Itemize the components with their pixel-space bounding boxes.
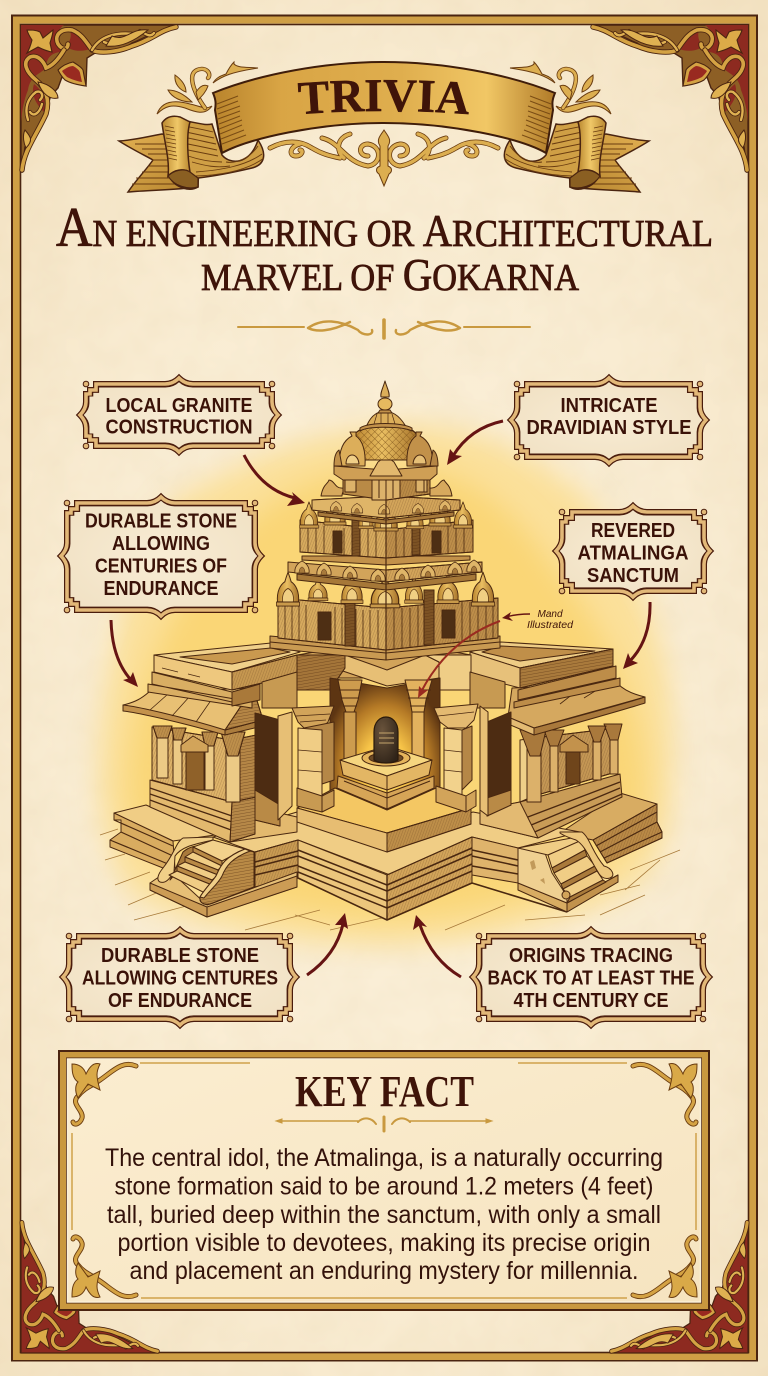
inner pillars xyxy=(338,680,432,762)
tower xyxy=(270,381,500,660)
wing base xyxy=(480,774,622,838)
dome crown xyxy=(360,411,412,431)
arrow: sanctum pointer xyxy=(418,621,500,698)
callout: revered atmalinga: ATMALINGA xyxy=(578,542,689,564)
stairs left balustrade xyxy=(158,837,213,882)
wing wall xyxy=(152,727,232,802)
stairs right balustrade xyxy=(560,832,613,879)
callout: durable stone lower xyxy=(63,930,296,1025)
right wing xyxy=(470,642,645,838)
upper cornice arches xyxy=(330,500,451,514)
stairs top xyxy=(518,837,584,855)
callout: revered atmalinga xyxy=(556,506,710,597)
callout: intricate dravidian xyxy=(511,378,706,463)
upper row of kuta domes xyxy=(300,500,472,531)
callout: local granite: CONSTRUCTION xyxy=(106,416,252,438)
wing parapet xyxy=(470,642,613,668)
callout: durable stone lower: DURABLE STONE xyxy=(101,944,259,967)
title line 1: AN ENGINEERING OR ARCHITECTURAL xyxy=(56,197,713,259)
arrow: durable stone upper xyxy=(111,620,138,687)
cornice arches xyxy=(295,560,481,581)
note arrow xyxy=(502,612,530,621)
wing roof xyxy=(508,684,645,728)
corner ornament: top left xyxy=(21,25,178,172)
ribbon right side xyxy=(504,62,649,192)
ribbon title: TRIVIA xyxy=(298,80,469,114)
tower base tier xyxy=(270,636,500,660)
callout: local granite xyxy=(80,378,278,452)
key fact body: The central idol, the Atmalinga, is a naturally occurring xyxy=(105,1144,663,1172)
key fact body: tall, buried deep within the sanctum, with only a small xyxy=(107,1201,661,1229)
main title xyxy=(56,197,713,300)
yellow wash behind temple xyxy=(99,424,673,945)
panel corner ornament: bottom left xyxy=(72,1237,136,1298)
corner ornament: bottom right xyxy=(610,1221,748,1353)
left wing xyxy=(123,643,300,842)
callout: origins: BACK TO AT LEAST THE xyxy=(488,966,694,990)
key fact body: portion visible to devotees, making its precise origin xyxy=(118,1229,650,1257)
wing columns xyxy=(157,727,240,802)
left outer platform xyxy=(110,805,215,868)
temple illustration xyxy=(100,381,680,930)
callout: local granite: LOCAL GRANITE xyxy=(106,394,252,417)
ribbon left side xyxy=(119,62,264,192)
tower centre edge xyxy=(385,500,387,660)
middle pillar body xyxy=(300,520,386,558)
key fact body: stone formation said to be around 1.2 meters (4 feet) xyxy=(114,1172,654,1200)
note text: Mand xyxy=(537,609,563,620)
arrow: intricate dravidian xyxy=(447,421,503,465)
shivalinga pedestal xyxy=(337,746,434,809)
callout: origins xyxy=(473,930,709,1025)
wing base xyxy=(150,780,297,842)
sanctum alcove xyxy=(297,678,471,852)
key fact body: and placement an enduring mystery for millennia. xyxy=(130,1257,638,1285)
stairs slab xyxy=(518,875,618,912)
mini dome left xyxy=(334,432,365,466)
callout: origins: 4TH CENTURY CE xyxy=(514,989,668,1012)
hand illustrated note xyxy=(502,609,573,631)
wing columns xyxy=(527,728,618,802)
sanctum floor xyxy=(297,788,471,833)
doorways xyxy=(255,712,511,826)
left stairs xyxy=(150,837,297,917)
callout: durable stone upper: DURABLE STONE xyxy=(85,510,237,532)
title line 2: MARVEL OF GOKARNA xyxy=(201,250,579,300)
right stairs xyxy=(518,832,618,912)
corner ornament: bottom left xyxy=(21,1221,159,1353)
callout: revered atmalinga: REVERED xyxy=(591,519,675,542)
panel corner ornament: top left xyxy=(72,1063,136,1124)
trivia ribbon banner xyxy=(116,60,652,193)
ribbon hatching xyxy=(217,96,551,144)
callout: intricate dravidian: INTRICATE xyxy=(560,394,658,417)
wing parapet xyxy=(154,643,300,672)
stairs block face xyxy=(518,848,567,903)
ornament below ribbon xyxy=(270,134,498,166)
tower neck xyxy=(343,478,430,500)
callout: durable stone upper: ALLOWING xyxy=(112,532,210,555)
callout: durable stone upper xyxy=(61,497,261,616)
key fact heading: KEY FACT xyxy=(295,1067,474,1116)
tower pillar body xyxy=(278,598,386,650)
ribbon main band xyxy=(213,62,555,153)
stairs treads xyxy=(193,840,245,861)
upper cornice xyxy=(312,496,460,518)
corner ornament: top right xyxy=(591,25,748,172)
callout: durable stone upper: ENDURANCE xyxy=(104,577,218,600)
panel frame xyxy=(59,1051,709,1310)
stairs slab xyxy=(150,870,297,917)
central plinth xyxy=(213,812,580,920)
callout: durable stone lower: OF ENDURANCE xyxy=(108,989,252,1012)
mini dome right xyxy=(407,432,438,466)
lower row of kuta domes xyxy=(276,572,495,608)
wing wall xyxy=(534,728,616,796)
stairs right balustrade xyxy=(200,849,254,904)
central upper mass xyxy=(262,640,505,708)
finial xyxy=(378,381,392,413)
panel corner ornament: top right xyxy=(633,1063,697,1124)
note text: Illustrated xyxy=(527,620,573,631)
panel corner ornament: bottom right xyxy=(633,1237,697,1298)
key fact body xyxy=(105,1144,663,1285)
front piers xyxy=(278,704,488,820)
callout: origins: ORIGINS TRACING xyxy=(509,944,673,967)
ornament centre drop xyxy=(376,130,392,186)
note text xyxy=(527,609,573,631)
main lattice dome xyxy=(353,425,418,460)
callout: durable stone upper: CENTURIES OF xyxy=(95,554,227,578)
ground paving lines xyxy=(100,829,680,930)
lower cornice xyxy=(288,562,482,582)
callout: durable stone lower: ALLOWING CENTURES xyxy=(82,966,278,990)
stairs treads xyxy=(548,840,585,868)
arrow: durable stone lower xyxy=(307,913,348,975)
arrow: atmalinga sanctum xyxy=(623,602,650,669)
callout: revered atmalinga: SANCTUM xyxy=(587,564,679,587)
arrow: local granite xyxy=(244,455,305,506)
wing roof xyxy=(123,688,263,730)
shivalinga stone xyxy=(374,717,398,763)
panel: key fact xyxy=(59,1051,709,1310)
title divider xyxy=(238,320,530,338)
key fact divider xyxy=(276,1117,492,1131)
callout: intricate dravidian: DRAVIDIAN STYLE xyxy=(526,416,692,439)
arrow: origins xyxy=(413,915,461,977)
right outer platform xyxy=(560,793,662,863)
corner nandi figures xyxy=(321,480,452,496)
